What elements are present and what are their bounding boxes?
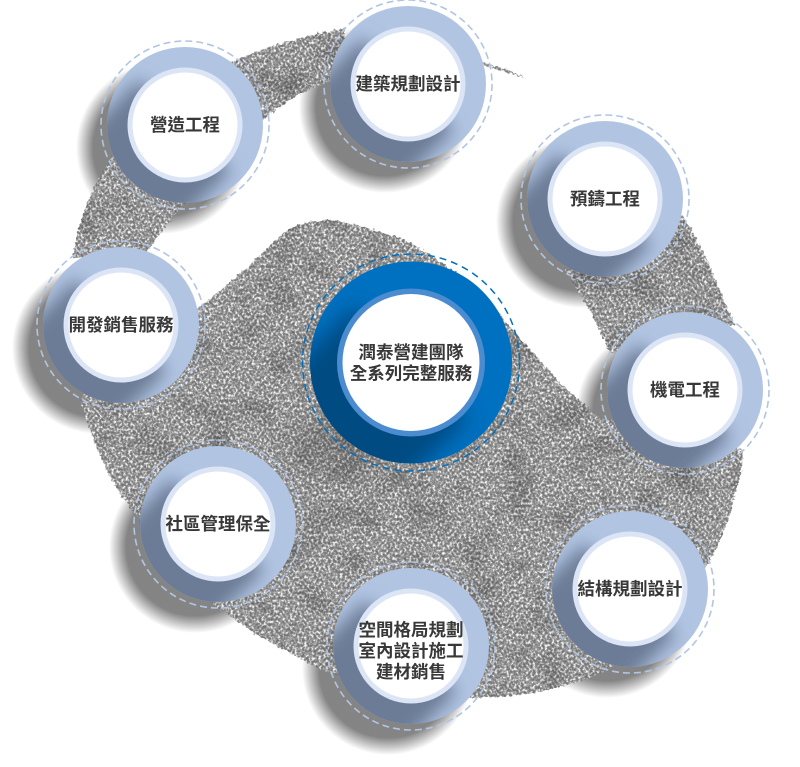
textured grey ribbon behind the circles bbox=[73, 28, 743, 698]
circle: 機電工程: 機電工程 bbox=[650, 380, 720, 400]
circle: 社區管理保全 bbox=[128, 440, 302, 614]
center hub: 潤泰營建團隊 全系列完整服務 bbox=[291, 254, 520, 482]
darker shading on the ribbon around the hub bbox=[290, 417, 400, 473]
circle: 空間格局規劃 室內設計施工 建材銷售: 空間格局規劃 bbox=[358, 620, 464, 640]
circle: 空間格局規劃 室內設計施工 建材銷售 bbox=[321, 562, 495, 736]
circle: 開發銷售服務 bbox=[31, 241, 205, 415]
circle: 開發銷售服務: 開發銷售服務 bbox=[68, 315, 174, 335]
circle: 空間格局規劃 室內設計施工 建材銷售: 室內設計施工 bbox=[358, 641, 464, 661]
circle: 營造工程: 營造工程 bbox=[150, 115, 220, 135]
circle: 預鑄工程: 預鑄工程 bbox=[570, 189, 640, 209]
circle: 空間格局規劃 室內設計施工 建材銷售: 建材銷售 bbox=[376, 662, 446, 682]
circle: 預鑄工程 bbox=[515, 115, 689, 289]
center hub: 潤泰營建團隊 全系列完整服務: 全系列完整服務 bbox=[350, 364, 473, 384]
center hub: 潤泰營建團隊 全系列完整服務: 潤泰營建團隊 bbox=[358, 342, 464, 362]
circle: 結構規劃設計 bbox=[540, 505, 714, 679]
circle: 結構規劃設計: 結構規劃設計 bbox=[578, 579, 682, 599]
circle: 營造工程 bbox=[95, 41, 269, 215]
circle: 建築規劃設計 bbox=[318, 0, 492, 174]
circle: 機電工程 bbox=[595, 306, 769, 480]
circle: 建築規劃設計: 建築規劃設計 bbox=[356, 74, 460, 94]
circle: 社區管理保全: 社區管理保全 bbox=[166, 514, 271, 534]
